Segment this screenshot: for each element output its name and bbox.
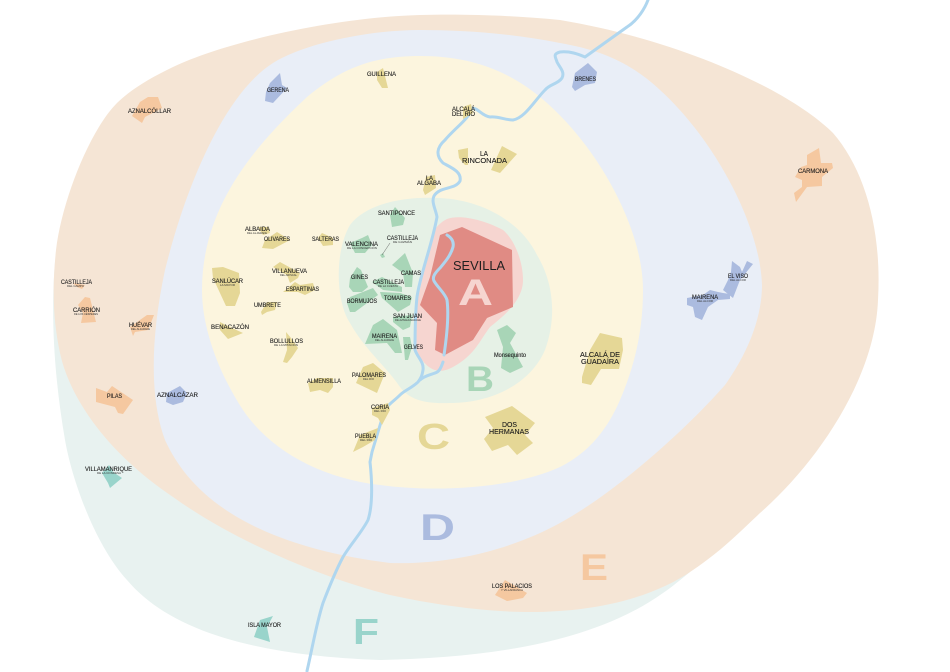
- municipality: Gines: [349, 267, 368, 292]
- municipality: Bormujos: BORMUJOS: [347, 299, 377, 305]
- municipality: Alcalá del Río: DEL RÍO: [452, 111, 475, 118]
- zone C area: [202, 56, 643, 489]
- municipality: Huévar del Aljarafe: [129, 315, 154, 336]
- municipality: Aznalcóllar: AZNALCÓLLAR: [128, 108, 172, 115]
- municipality: Carmona: CARMONA: [798, 169, 828, 175]
- municipality: Sanlúcar la Mayor: SANLÚCAR: [212, 278, 244, 285]
- municipality: Valencina: VALENCINA: [345, 242, 378, 248]
- municipality: Pilas: PILAS: [107, 394, 122, 400]
- municipality: El Viso del Alcor: DEL ALCOR: [730, 278, 747, 282]
- municipality: La Rinconada: [458, 146, 517, 173]
- municipality: Villamanrique de la Condesa: VILLAMANRIQUE: [85, 467, 132, 473]
- municipality: Almensilla: ALMENSILLA: [307, 379, 341, 385]
- zone B area: [339, 198, 552, 403]
- municipality: Espartinas: ESPARTINAS: [286, 287, 319, 293]
- municipality: Camas: [392, 253, 421, 287]
- municipality: Villamanrique de la Condesa: DE LA CONDESA: [97, 471, 121, 475]
- municipality: Guillena: [367, 68, 396, 88]
- municipality: La Algaba: ALGABA: [417, 181, 441, 187]
- municipality: Valencina: DE LA CONCEPCIÓN: [347, 245, 377, 250]
- municipality: Bollullos de la Mitación: DE LA MITACIÓN: [274, 342, 298, 347]
- municipality: Isla Mayor: [248, 616, 282, 642]
- municipality: Mairena del Aljarafe: DEL ALJARAFE: [375, 338, 394, 342]
- zone D area: [154, 30, 762, 563]
- municipality: Camas: CAMAS: [401, 271, 421, 277]
- municipality: Carmona: [794, 148, 833, 202]
- municipality: Los Palacios y Villafranca: Y VILLAFRANCA: [501, 588, 523, 592]
- zone letter E: E: [580, 547, 608, 588]
- municipality: Castilleja de Guzmán: DE GUZMÁN: [393, 240, 412, 244]
- municipality: Palomares del Río: PALOMARES: [352, 373, 386, 379]
- municipality: Bollullos de la Mitación: BOLLULLOS: [270, 339, 303, 345]
- zone A outer area: [415, 217, 523, 371]
- municipality: Dos Hermanas: [484, 406, 535, 455]
- zone letter C: C: [417, 416, 450, 457]
- municipality: Gelves: GELVES: [404, 345, 423, 351]
- municipality: Villanueva del Ariscal: [272, 262, 307, 283]
- municipality: Alcalá del Río: [452, 104, 475, 119]
- municipality: Castilleja del Campo: [61, 280, 92, 289]
- municipality: La Algaba: [417, 175, 441, 195]
- municipality: Los Palacios y Villafranca: [492, 580, 532, 601]
- municipality: Alcalá de Guadaíra: GUADAÍRA: [581, 357, 619, 366]
- municipality: Huévar del Aljarafe: HUÉVAR: [129, 322, 153, 329]
- municipality: Tomares: [380, 292, 412, 312]
- zone letter F: F: [353, 611, 379, 652]
- municipality: Olivares: [262, 232, 290, 249]
- municipality: Carrión de los Céspedes: CARRIÓN: [73, 307, 100, 314]
- municipality: Sanlúcar la Mayor: LA MAYOR: [220, 283, 236, 287]
- municipality: Almensilla: [307, 378, 341, 393]
- municipality: Albaida: DEL ALJARAFE: [247, 231, 267, 235]
- municipality: Aznalcázar: AZNALCÁZAR: [157, 392, 199, 399]
- municipality: Umbrete: UMBRETE: [254, 303, 281, 309]
- municipality: Castilleja de Guzmán: [380, 236, 418, 258]
- municipality: Dos Hermanas: HERMANAS: [489, 427, 529, 436]
- municipality: Castilleja de la Cuesta: DE LA CUESTA: [378, 284, 398, 288]
- municipality: La Rinconada: LA: [480, 149, 488, 158]
- municipality: Puebla del Río: DEL RÍO: [360, 438, 373, 442]
- municipality: Coria del Río: DEL RÍO: [374, 409, 387, 413]
- municipality: Salteras: [312, 233, 339, 246]
- municipality: Monsequinto: Monsequinto: [494, 353, 527, 359]
- municipality: Umbrete: [254, 302, 281, 315]
- municipality: Palomares del Río: [352, 363, 386, 393]
- municipality: Villanueva del Ariscal: VILLANUEVA: [272, 269, 307, 275]
- municipality: Huévar del Aljarafe: DEL ALJARAFE: [131, 327, 150, 331]
- municipality: Mairena del Aljarafe: [365, 319, 402, 353]
- municipality: Mairena del Aljarafe: MAIRENA: [372, 334, 397, 340]
- municipality: Brenes: [572, 63, 597, 91]
- municipality: Los Palacios y Villafranca: LOS PALACIOS: [492, 584, 532, 590]
- municipality: Alcalá de Guadaíra: [580, 333, 623, 385]
- municipality: Santiponce: SANTIPONCE: [378, 211, 415, 217]
- municipality: Gines: GINES: [351, 275, 368, 281]
- municipality: Alcalá de Guadaíra: ALCALÁ DE: [580, 350, 620, 359]
- municipality: Benacazón: [211, 322, 249, 339]
- municipality: Puebla del Río: [353, 428, 378, 452]
- municipality: La Algaba: LA: [426, 176, 433, 182]
- municipality: Benacazón: BENACAZÓN: [211, 324, 249, 331]
- municipality: Albaida: ALBAIDA: [245, 227, 270, 233]
- zone letter D: D: [420, 507, 455, 548]
- municipality: San Juan: [393, 314, 422, 330]
- municipality: Alcalá del Río: ALCALÁ: [452, 106, 475, 113]
- municipality: Palomares del Río: DEL RÍO: [363, 377, 375, 381]
- municipality: Carrión de los Céspedes: DE LOS CÉSPEDES: [74, 311, 98, 316]
- municipality: Castilleja del Campo: DEL CAMPO: [67, 284, 85, 288]
- municipality: Castilleja de la Cuesta: [372, 277, 404, 292]
- municipality: Salteras: SALTERAS: [312, 237, 339, 243]
- municipality: Aznalcóllar: [128, 97, 172, 123]
- municipality: Castilleja del Campo: CASTILLEJA: [61, 280, 92, 286]
- zone E area: [54, 15, 879, 612]
- municipality: San Juan: DE AZNALFARACHE: [395, 318, 421, 322]
- river Guadalquivir: [307, 0, 648, 671]
- zone letter B: B: [466, 360, 494, 399]
- municipality: Castilleja de Guzmán: CASTILLEJA: [387, 236, 418, 242]
- municipality: Tomares: TOMARES: [384, 296, 411, 302]
- municipality: Espartinas: [283, 282, 319, 295]
- label: Sevilla: SEVILLA: [453, 258, 505, 273]
- municipality: Carrión de los Céspedes: [73, 297, 100, 323]
- municipality: Puebla del Río: PUEBLA: [355, 434, 376, 440]
- municipality: Olivares: OLIVARES: [264, 237, 290, 243]
- municipality: El Viso del Alcor: EL VISO: [728, 274, 748, 280]
- municipality: Mairena del Alcor: DEL ALCOR: [697, 299, 714, 303]
- municipality: Castilleja de la Cuesta: CASTILLEJA: [373, 280, 404, 286]
- municipality: Gelves: [403, 337, 423, 360]
- municipality: Isla Mayor: ISLA MAYOR: [248, 623, 282, 629]
- municipality: Valencina: [345, 235, 378, 253]
- municipality: Bollullos de la Mitación: [270, 332, 303, 363]
- municipality: Mairena del Alcor: MAIRENA: [692, 295, 718, 301]
- zone F area: [53, 262, 690, 660]
- municipality: Aznalcázar: [157, 386, 199, 405]
- Sevilla municipality: [420, 227, 513, 355]
- municipality: Bormujos: [347, 288, 378, 312]
- municipality: San Juan: SAN JUAN: [393, 314, 422, 320]
- municipality: Pilas: [96, 386, 133, 414]
- municipality: Gerena: [265, 73, 289, 103]
- municipality: Monsequinto: [494, 325, 527, 373]
- municipality: La Rinconada: RINCONADA: [462, 156, 507, 165]
- municipality: Gerena: GERENA: [267, 88, 289, 94]
- municipality: Villanueva del Ariscal: DEL ARISCAL: [280, 273, 297, 277]
- municipality: Mairena del Alcor: [687, 290, 730, 320]
- municipality: Guillena: GUILLENA: [367, 72, 396, 78]
- zone letter A: A: [458, 272, 493, 313]
- municipality: Villamanrique de la Condesa: [85, 465, 132, 488]
- municipality: Brenes: BRENES: [575, 77, 596, 83]
- municipality: Dos Hermanas: DOS: [502, 420, 517, 429]
- municipality: Sanlúcar la Mayor: [212, 267, 244, 306]
- municipality: Coria del Río: [371, 403, 390, 425]
- municipality: Coria del Río: CORIA: [371, 405, 389, 411]
- municipality: El Viso del Alcor: [723, 261, 753, 298]
- municipality: Santiponce: [378, 207, 415, 227]
